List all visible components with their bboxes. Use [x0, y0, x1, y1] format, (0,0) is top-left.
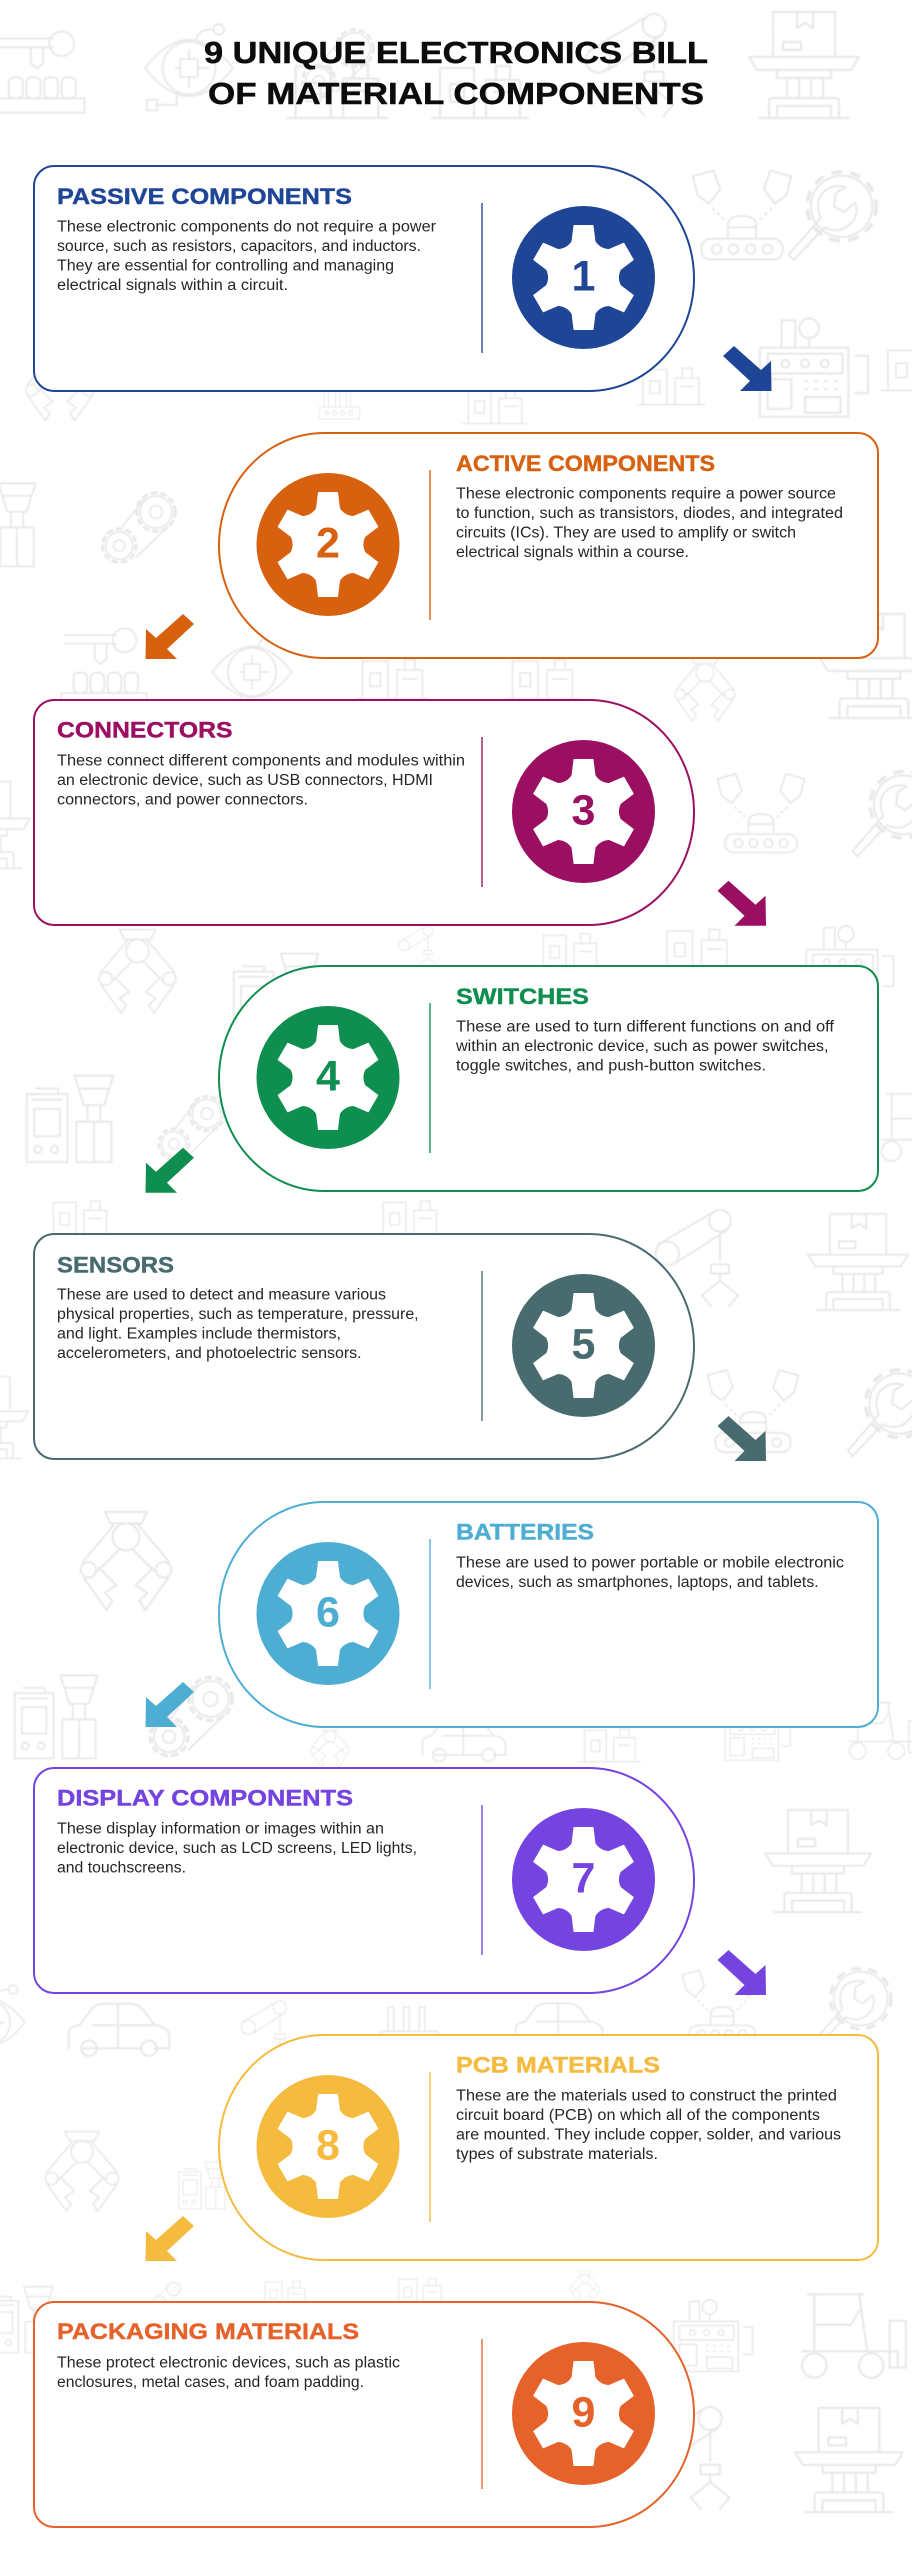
card outline — [219, 1502, 878, 1727]
description: accelerometers, and photoelectric sensors. — [57, 1345, 362, 1362]
card outline — [34, 700, 694, 925]
icon: gear number 1 — [512, 206, 655, 349]
description: circuit board (PCB) on which all of the components — [456, 2107, 820, 2124]
panel: packaging materials — [34, 2302, 694, 2527]
description: an electronic device, such as USB connectors, HDMI — [57, 772, 433, 789]
description: These are used to turn different functions on and off — [456, 1018, 835, 1036]
card outline — [219, 433, 878, 658]
description — [456, 1554, 844, 1591]
icon: gear number 2 — [256, 473, 400, 616]
arrow: card 1 to 2 — [723, 346, 772, 391]
description — [57, 218, 436, 294]
icon: gear number 3: 3 — [572, 786, 595, 834]
description: toggle switches, and push-button switches. — [456, 1058, 766, 1074]
description: These electronic components do not require a power — [57, 218, 436, 236]
title: 9 UNIQUE ELECTRONICS BILL — [204, 35, 708, 70]
heading: PACKAGING MATERIALS — [57, 2319, 359, 2344]
icon: gear number 8: 8 — [316, 2122, 340, 2170]
description: within an electronic device, such as power switches, — [455, 1038, 828, 1055]
heading: BATTERIES — [456, 1520, 594, 1544]
description: These connect different components and modules within — [57, 752, 465, 770]
description: They are essential for controlling and managing — [57, 258, 394, 274]
icon: gear number 5: 5 — [572, 1320, 595, 1368]
icon: gear number 8 — [256, 2075, 400, 2218]
description: These are used to detect and measure various — [57, 1286, 386, 1304]
icon: gear number 4 — [256, 1006, 400, 1149]
heading: CONNECTORS — [57, 718, 232, 742]
description: devices, such as smartphones, laptops, and tablets. — [456, 1574, 819, 1591]
arrow: card 6 to 7 — [146, 1682, 194, 1727]
heading: SENSORS — [57, 1252, 174, 1278]
heading: PCB MATERIALS — [456, 2052, 660, 2078]
arrow: card 4 to 5 — [146, 1148, 194, 1193]
panel: passive components — [34, 166, 694, 391]
description — [57, 1286, 419, 1362]
icon: gear number 7: 7 — [572, 1854, 595, 1902]
panel: pcb materials — [219, 2035, 878, 2260]
arrow: card 7 to 8 — [718, 1950, 766, 1995]
arrow: card 8 to 9 — [146, 2216, 194, 2261]
panel: display components — [34, 1768, 694, 1993]
description: electronic device, such as LCD screens, LED lights, — [57, 1840, 417, 1857]
heading: ACTIVE COMPONENTS — [456, 451, 715, 476]
card outline — [219, 2035, 878, 2260]
description: These display information or images within an — [57, 1820, 384, 1838]
icon: gear number 2: 2 — [316, 520, 340, 568]
card outline — [34, 1768, 694, 1993]
description: These electronic components require a power source — [456, 486, 836, 502]
card outline — [34, 1234, 694, 1459]
panel: active components — [219, 433, 878, 658]
icon: gear number 4: 4 — [316, 1052, 340, 1100]
description: source, such as resistors, capacitors, and inductors. — [57, 238, 421, 255]
description: and light. Examples include thermistors, — [57, 1326, 341, 1342]
description — [57, 2354, 400, 2391]
arrow: card 3 to 4 — [718, 881, 766, 926]
panel: batteries — [219, 1502, 878, 1727]
panel: sensors — [34, 1234, 694, 1459]
description: are mounted. They include copper, solder, and various — [456, 2126, 841, 2144]
panel: connectors — [34, 700, 694, 925]
description — [57, 1820, 417, 1876]
description: electrical signals within a course. — [456, 544, 689, 561]
heading: PASSIVE COMPONENTS — [57, 184, 352, 209]
arrow: card 5 to 6 — [718, 1416, 766, 1461]
description — [455, 1018, 835, 1074]
card outline — [219, 966, 878, 1191]
description: enclosures, metal cases, and foam padding. — [57, 2374, 364, 2391]
icon: gear number 3 — [512, 740, 655, 883]
title — [204, 35, 708, 111]
card outline — [34, 2302, 694, 2527]
description: physical properties, such as temperature, pressure, — [57, 1306, 419, 1323]
icon: gear number 1: 1 — [572, 252, 595, 300]
icon: gear number 7 — [512, 1808, 655, 1951]
description: circuits (ICs). They are used to amplify or switch — [456, 524, 796, 542]
icon: gear number 9 — [512, 2342, 655, 2485]
icon: gear number 5 — [512, 1274, 655, 1417]
description: electrical signals within a circuit. — [57, 277, 288, 294]
icon: gear number 6: 6 — [316, 1588, 340, 1636]
description: These are the materials used to construct the printed — [456, 2088, 837, 2104]
description: These are used to power portable or mobile electronic — [456, 1554, 844, 1572]
heading: SWITCHES — [456, 984, 589, 1009]
description — [456, 2088, 841, 2163]
icon: gear number 9: 9 — [572, 2388, 595, 2436]
heading: DISPLAY COMPONENTS — [57, 1786, 353, 1810]
description: and touchscreens. — [57, 1860, 186, 1876]
icon: gear number 6 — [256, 1542, 400, 1685]
description — [456, 486, 843, 561]
description: connectors, and power connectors. — [57, 792, 308, 808]
panel: switches — [219, 966, 878, 1191]
title: OF MATERIAL COMPONENTS — [208, 76, 704, 111]
description: to function, such as transistors, diodes, and integrated — [456, 505, 843, 522]
arrow: card 2 to 3 — [146, 614, 194, 659]
card outline — [34, 166, 694, 391]
description — [57, 752, 465, 808]
description: types of substrate materials. — [456, 2146, 658, 2163]
description: These protect electronic devices, such as plastic — [57, 2354, 400, 2372]
